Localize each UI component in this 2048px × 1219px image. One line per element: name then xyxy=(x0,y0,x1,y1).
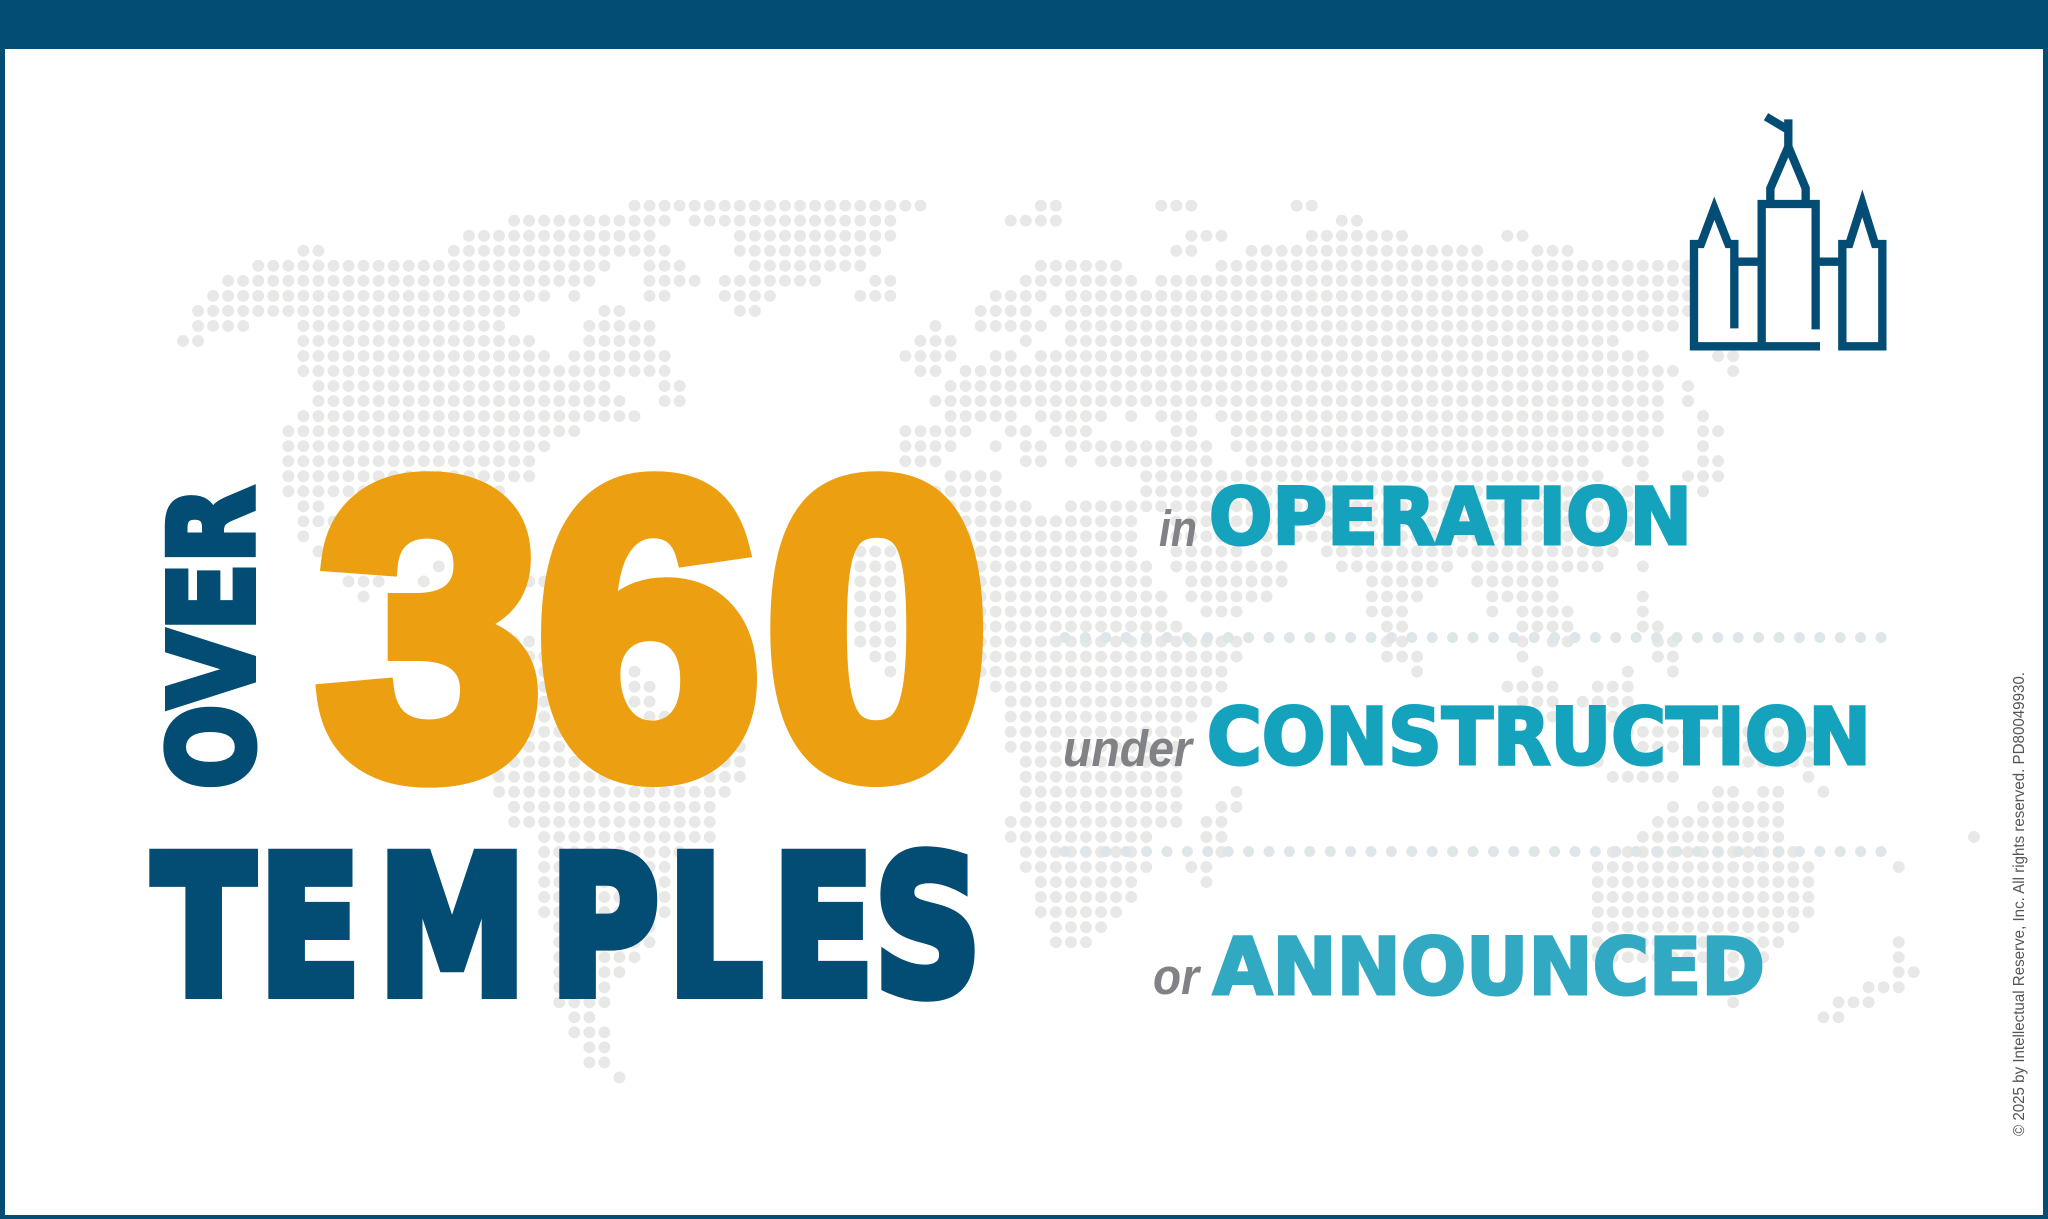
dotted horizontal guide lines xyxy=(1065,638,1882,852)
icon: temple xyxy=(1690,117,1887,351)
label: under CONSTRUCTION: under xyxy=(1063,720,1195,777)
heading: TEMPLES: TEMPLES xyxy=(153,817,981,1039)
label: in OPERATION: OPERATION xyxy=(1209,473,1692,563)
label: or ANNOUNCED: or xyxy=(1153,948,1202,1005)
label: or ANNOUNCED: ANNOUNCED xyxy=(1213,923,1765,1013)
label: under CONSTRUCTION: CONSTRUCTION xyxy=(1207,693,1871,783)
copyright note (rotated): © 2025 by Intellectual Reserve, Inc. All rights reserved. PD80049930. xyxy=(2011,672,2028,1136)
label: in OPERATION: in xyxy=(1159,500,1197,557)
heading: OVER (rotated): OVER xyxy=(146,487,280,789)
big number: 360: 360 xyxy=(318,396,989,860)
dotted world map xyxy=(183,206,1974,1077)
